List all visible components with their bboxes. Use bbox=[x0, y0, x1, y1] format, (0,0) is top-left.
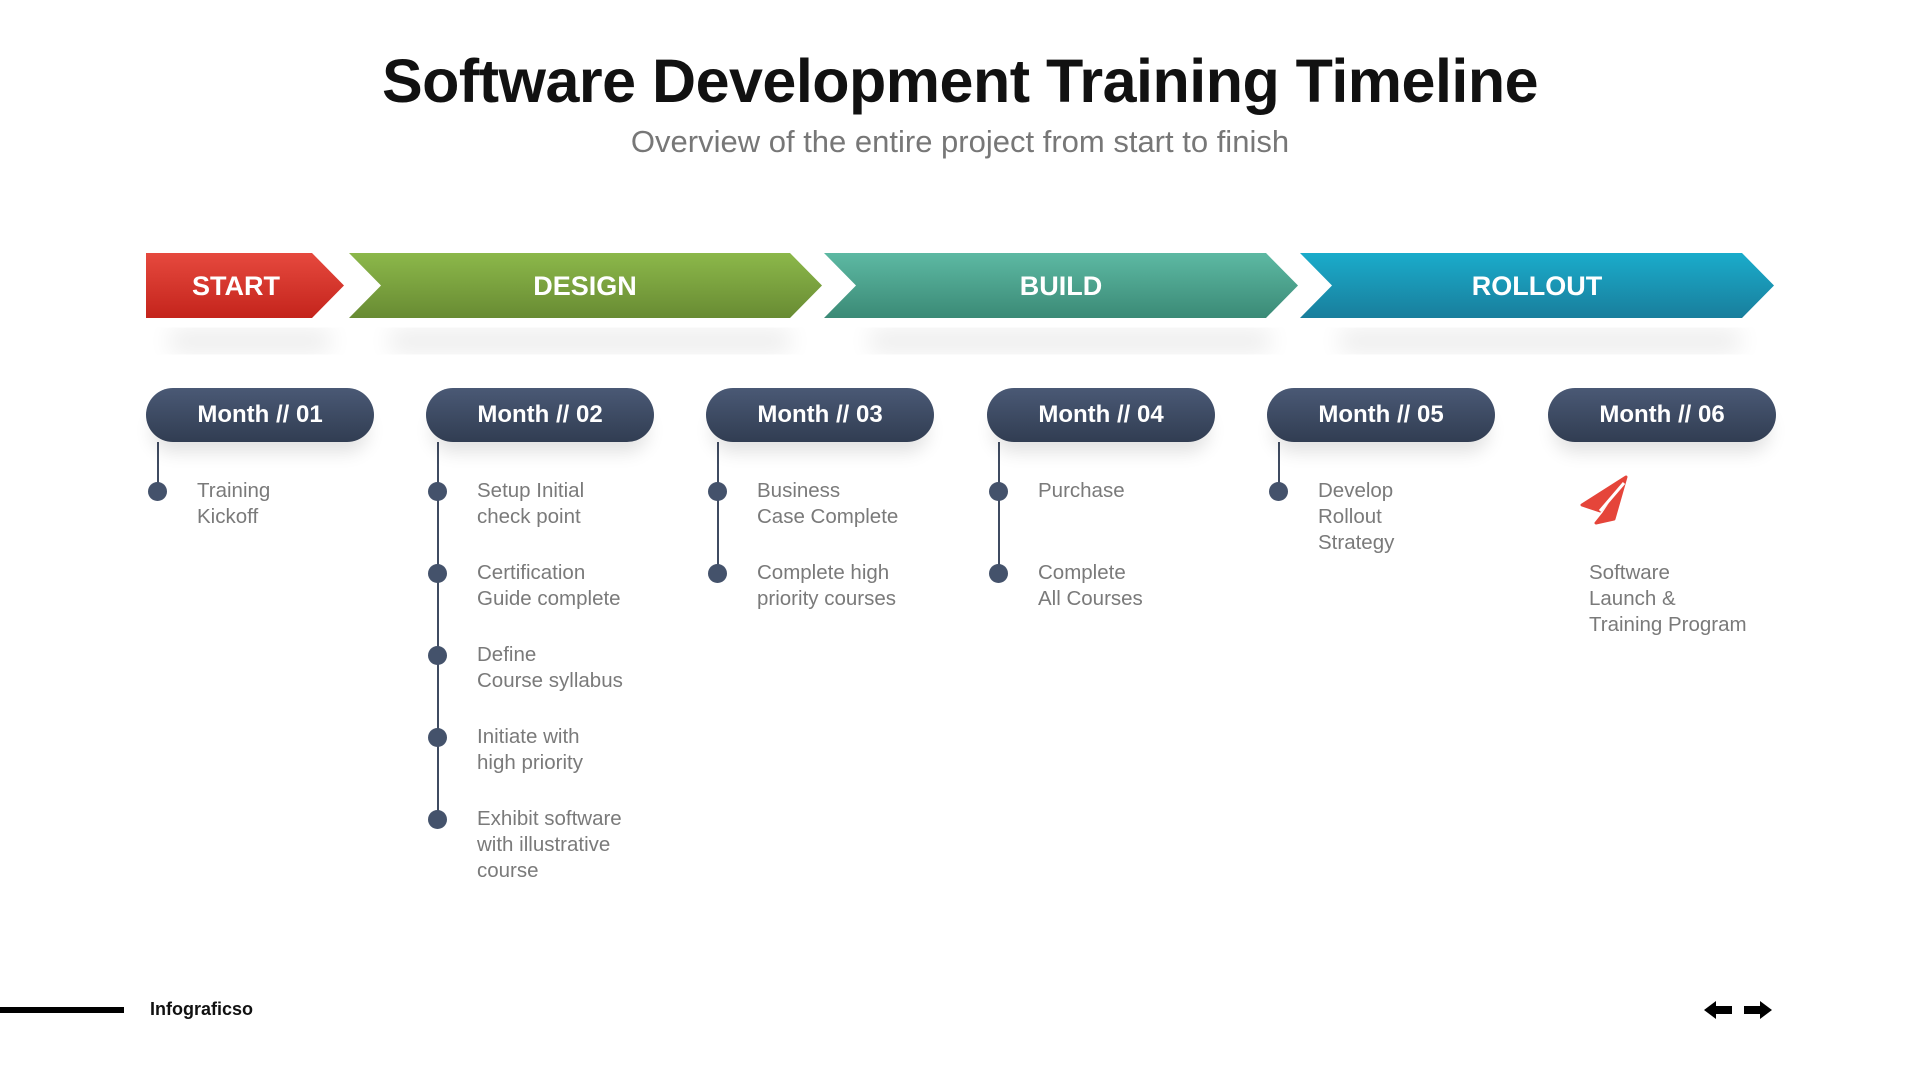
text: Training Kickoff: Training bbox=[197, 479, 270, 502]
column: month 02 bbox=[426, 388, 654, 882]
column: month 02: Guide complete bbox=[477, 587, 621, 610]
text: Training Kickoff bbox=[197, 479, 270, 528]
column: month 02: Exhibit software bbox=[477, 807, 622, 830]
column: month 03: priority courses bbox=[757, 587, 896, 610]
text: Develop Rollout Strategy bbox=[1318, 479, 1394, 554]
pill: Month 05 bbox=[1267, 388, 1495, 442]
pill: Month 03 bbox=[706, 388, 934, 442]
column: month 04: Complete bbox=[1038, 561, 1126, 584]
footer brand: Infograficso bbox=[150, 999, 253, 1019]
text: month 04 items bbox=[1038, 479, 1143, 610]
column: month 02: Define bbox=[477, 643, 536, 666]
arrow: DESIGN: DESIGN bbox=[533, 271, 637, 301]
arrow: START bbox=[146, 253, 344, 318]
arrow: DESIGN bbox=[349, 253, 822, 318]
title: Software Development Training Timeline bbox=[382, 47, 1538, 115]
column: month 04: Purchase bbox=[1038, 479, 1125, 502]
column: month 02: course bbox=[477, 859, 539, 882]
column: month 02: Initiate with bbox=[477, 725, 580, 748]
column: month 02: Setup Initial bbox=[477, 479, 584, 502]
pill: Month 05: Month // 05 bbox=[1318, 401, 1444, 428]
column: month 03: Complete high bbox=[757, 561, 889, 584]
pill: Month 04: Month // 04 bbox=[1038, 401, 1164, 428]
icon: nav arrows bbox=[1704, 1001, 1772, 1019]
column: month 01 bbox=[146, 388, 374, 528]
pill: Month 04 bbox=[987, 388, 1215, 442]
pill: Month 02 bbox=[426, 388, 654, 442]
column: month 02: with illustrative bbox=[477, 833, 610, 856]
column: month 04 bbox=[987, 388, 1215, 610]
arrow: START: START bbox=[192, 271, 280, 301]
phase banner bbox=[146, 253, 1774, 354]
text: Develop Rollout Strategy: Rollout bbox=[1318, 505, 1382, 528]
column: month 02: Certification bbox=[477, 561, 585, 584]
text: month 02 items bbox=[477, 479, 623, 882]
arrow: ROLLOUT: ROLLOUT bbox=[1472, 271, 1603, 301]
pill: Month 01 bbox=[146, 388, 374, 442]
pill: Month 02: Month // 02 bbox=[477, 401, 603, 428]
column: month 03 bbox=[706, 388, 934, 610]
pill: Month 06 bbox=[1548, 388, 1776, 442]
pill: Month 01: Month // 01 bbox=[197, 401, 323, 428]
column: month 03: Case Complete bbox=[757, 505, 898, 528]
text: Develop Rollout Strategy: Strategy bbox=[1318, 531, 1394, 554]
subtitle: Overview of the entire project from start to finish bbox=[631, 124, 1289, 159]
text: Develop Rollout Strategy: Develop bbox=[1318, 479, 1393, 502]
text: month 03 items bbox=[757, 479, 898, 610]
text: Training Kickoff: Kickoff bbox=[197, 505, 258, 528]
column: month 03: Business bbox=[757, 479, 840, 502]
text: Software Launch & Training Program: Launch & bbox=[1589, 587, 1676, 610]
column: month 02: Course syllabus bbox=[477, 669, 623, 692]
column: month 02: check point bbox=[477, 505, 581, 528]
icon: paper plane bbox=[1580, 476, 1628, 524]
pill: Month 03: Month // 03 bbox=[757, 401, 883, 428]
footer bar bbox=[0, 1007, 124, 1013]
arrow: BUILD bbox=[824, 253, 1298, 318]
arrow: BUILD: BUILD bbox=[1020, 271, 1102, 301]
pill: Month 06: Month // 06 bbox=[1599, 401, 1725, 428]
arrow: ROLLOUT bbox=[1300, 253, 1774, 318]
column: month 04: All Courses bbox=[1038, 587, 1143, 610]
column: month 06 bbox=[1548, 388, 1776, 636]
text: Software Launch & Training Program: Software bbox=[1589, 561, 1670, 584]
text: Software Launch & Training Program bbox=[1589, 561, 1747, 636]
text: Software Launch & Training Program: Training Program bbox=[1589, 613, 1747, 636]
column: month 05 bbox=[1267, 388, 1495, 554]
column: month 02: high priority bbox=[477, 751, 583, 774]
